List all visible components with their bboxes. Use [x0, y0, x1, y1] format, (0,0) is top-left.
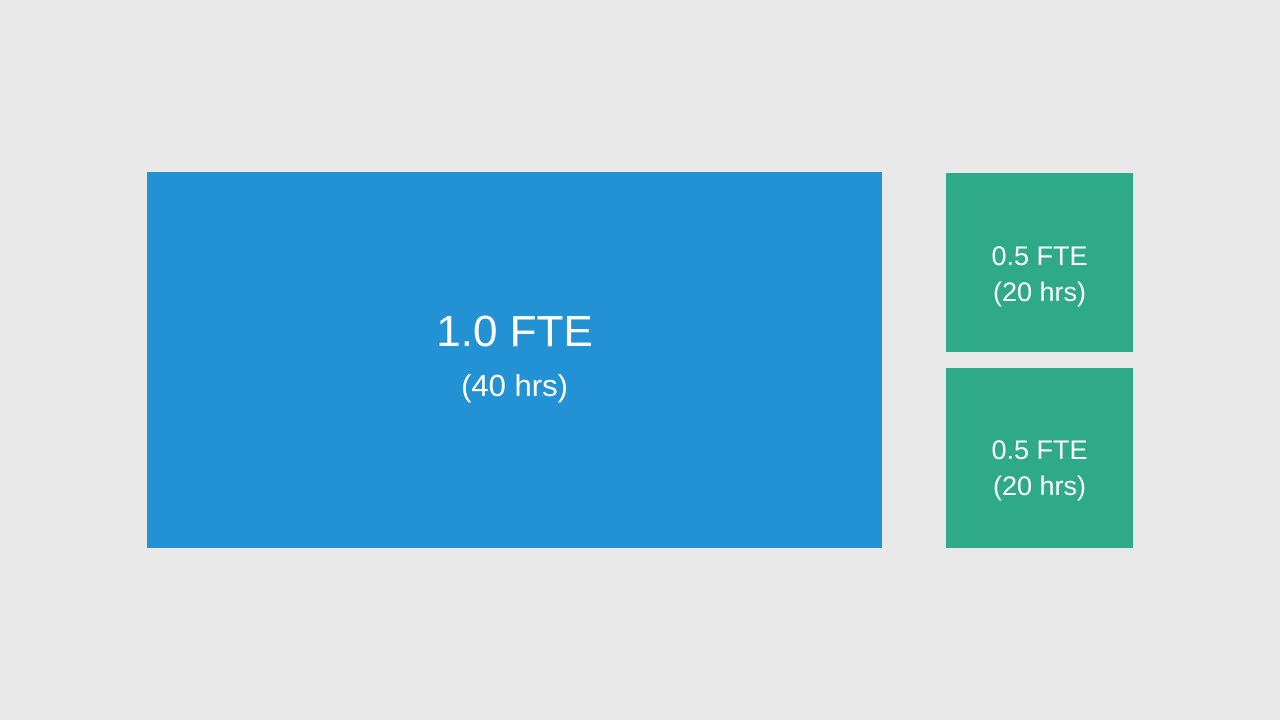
panel: 1.0 FTE blue block	[147, 172, 882, 548]
label: 0.5 FTE bottom: 0.5 FTE	[991, 435, 1088, 465]
label: 40 hrs: (40 hrs)	[461, 368, 568, 403]
label: 0.5 FTE top: 0.5 FTE	[991, 240, 1088, 270]
label: 1.0 FTE: 1.0 FTE	[436, 307, 593, 356]
label: 0.5 FTE bottom: (20 hrs)	[993, 471, 1086, 501]
label: 0.5 FTE bottom	[991, 435, 1088, 501]
label: 0.5 FTE top: (20 hrs)	[993, 276, 1086, 306]
panel: 0.5 FTE top green block	[946, 173, 1133, 352]
label: 0.5 FTE top	[991, 240, 1088, 306]
panel: 0.5 FTE bottom green block	[946, 368, 1133, 548]
